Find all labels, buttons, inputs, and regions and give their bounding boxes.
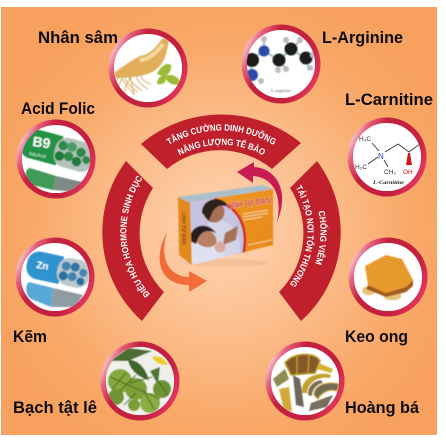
icon: tribulus plant <box>103 344 177 418</box>
label: L-Arginine: L-Arginine <box>322 29 403 47</box>
label: Nhân sâm: Nhân sâm <box>38 29 118 47</box>
icon: vitamin B9 capsule: folicAcid <box>29 151 47 159</box>
product box: LINH TỰ ĐAN <box>180 212 186 245</box>
panel: nutrition arc <box>141 114 301 169</box>
icon: propolis honeycomb <box>351 240 425 314</box>
panel: anti-inflammation arc <box>279 161 341 321</box>
icon: L-carnitine formula: OH <box>403 169 413 176</box>
panel: nutrition arc: NĂNG LƯỢNG TẾ BÀO <box>177 138 265 156</box>
arrow: pink <box>237 162 282 222</box>
label: L-Carnitine: L-Carnitine <box>345 91 433 109</box>
icon: L-carnitine formula: N <box>378 152 384 161</box>
icon: arginine molecule <box>244 27 318 101</box>
panel: anti-inflammation arc: TÁI TẠO NƠI TỔN THƯƠNG <box>290 184 315 287</box>
label: Hoàng bá: Hoàng bá <box>345 399 420 417</box>
label: Bạch tật lê: Bạch tật lê <box>13 399 97 417</box>
icon: L-carnitine formula <box>350 120 424 194</box>
label: Kẽm: Kẽm <box>13 328 47 346</box>
label: Keo ong: Keo ong <box>345 328 408 346</box>
arrow: orange <box>160 232 207 292</box>
icon: ginseng <box>111 31 185 105</box>
panel: anti-inflammation arc: CHỐNG VIÊM <box>315 211 328 265</box>
icon: vitamin B9 capsule: B9 <box>32 133 52 151</box>
icon: L-carnitine formula: H₃C <box>355 164 367 171</box>
panel: nutrition arc: TĂNG CƯỜNG DINH DƯỠNG <box>166 124 276 144</box>
icon: vitamin B9 capsule <box>18 122 97 196</box>
icon: L-carnitine formula: H₃C <box>359 136 371 143</box>
panel: hormone arc: ĐIỀU HÒA HORMONE SINH DỤC <box>120 176 150 298</box>
icon: zinc capsule: Zn <box>36 260 49 273</box>
icon: arginine molecule: L-arginine <box>271 88 291 93</box>
label: Acid Folic: Acid Folic <box>21 100 95 118</box>
icon: L-carnitine formula: CH₃ <box>384 169 396 176</box>
panel: hormone arc <box>102 161 164 321</box>
product box: LINH TỰ ĐAN <box>226 195 271 211</box>
icon: phellodendron bark <box>268 344 342 418</box>
icon: L-carnitine formula: L-Carnitine <box>372 180 405 186</box>
icon: zinc capsule <box>18 240 93 314</box>
product box <box>178 185 273 268</box>
